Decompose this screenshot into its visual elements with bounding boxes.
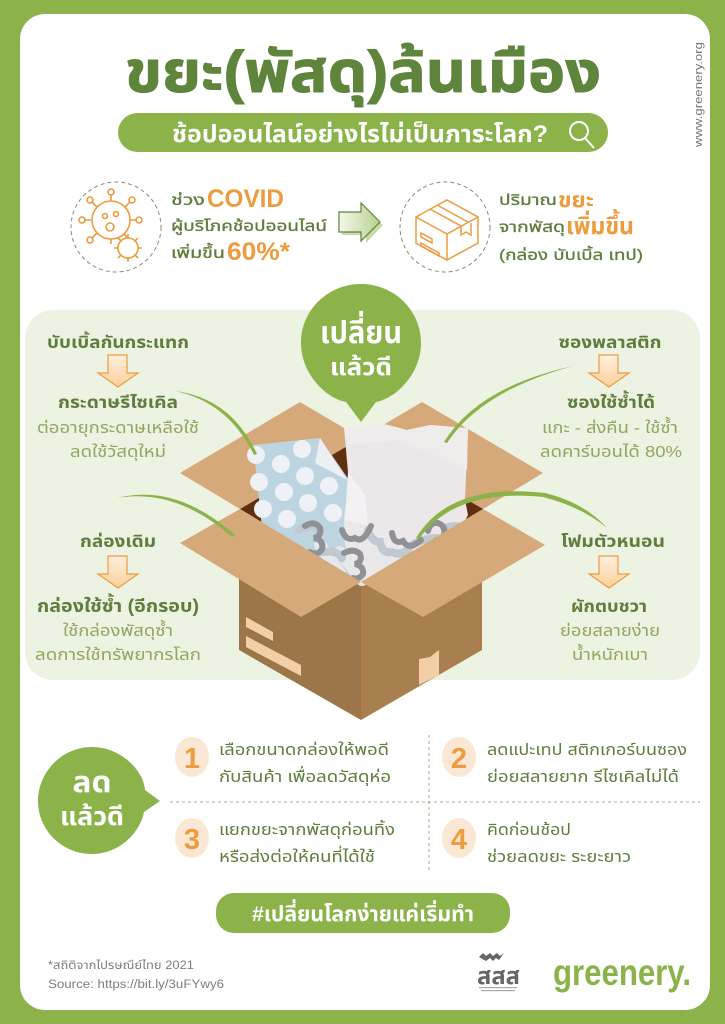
swap: plastic mailer to reusable mailer: ซองใช้ซ้ำได้ xyxy=(567,390,655,412)
hashtag pill: #เปลี่ยนโลกง่ายแค่เริ่มทำ xyxy=(252,899,474,926)
swap: old box to reused box: กล่องเดิม xyxy=(80,531,156,551)
swap: foam peanuts to water hyacinth: โฟมตัวหนอน xyxy=(561,532,665,551)
text: covid statistic: ช่วง xyxy=(171,191,205,209)
panel: change is good xyxy=(25,310,700,680)
tip 3: หรือส่งต่อให้คนที่ได้ใช้ xyxy=(219,845,375,866)
swap: old box to reused box: กล่องใช้ซ้ำ (อีกรอบ) xyxy=(37,593,199,616)
swap: plastic mailer to reusable mailer xyxy=(540,333,682,461)
swap: bubble wrap to recycled paper: ลดใช้วัสดุใหม่ xyxy=(70,443,166,461)
arrow: down xyxy=(98,556,138,588)
footnote source xyxy=(48,959,224,991)
tip 4: คิดก่อนช้อป xyxy=(487,821,571,839)
swap: foam peanuts to water hyacinth xyxy=(560,532,665,664)
tip 2: ย่อยสลายยาก รีไซเคิลไม่ได้ xyxy=(487,768,679,786)
foam peanuts xyxy=(299,523,465,580)
arrow: down xyxy=(589,355,629,387)
text: covid statistic: 60%* xyxy=(227,238,290,266)
logo: greenery: greenery. xyxy=(553,952,691,993)
swap: old box to reused box: ใช้กล่องพัสดุซ้ำ xyxy=(63,619,173,640)
arrow: leads to xyxy=(339,203,383,243)
tip 3: แยกขยะจากพัสดุก่อนทิ้ง xyxy=(219,819,395,839)
tip 2 xyxy=(442,737,687,786)
icon: magnifier xyxy=(570,122,594,148)
text: waste amount: ปริมาณ xyxy=(499,192,557,209)
text: covid statistic: COVID xyxy=(207,185,284,213)
footnote source: *สถิติจากไปรษณีย์ไทย 2021 xyxy=(48,959,194,972)
tip 4: 4 xyxy=(451,824,467,856)
title: ขยะ(พัสดุ)ล้นเมือง xyxy=(125,40,601,107)
tip 1: 1 xyxy=(184,743,200,775)
bubble wrap xyxy=(247,438,352,584)
logo: thaihealth: สสส xyxy=(477,963,520,990)
callout: reduce is good: แล้วดี xyxy=(60,801,124,831)
swap: bubble wrap to recycled paper: กระดาษรีไซเคิล xyxy=(58,393,178,412)
callout: change is good: เปลี่ยน xyxy=(320,310,402,350)
swap: bubble wrap to recycled paper: ต่ออายุกระดาษเหลือใช้ xyxy=(37,419,199,437)
box front flaps xyxy=(180,509,545,617)
swap: bubble wrap to recycled paper xyxy=(37,331,199,461)
text: covid statistic: เพิ่มขึ้น xyxy=(171,242,225,262)
box label stripes xyxy=(246,617,439,685)
swap: old box to reused box: ลดการใช้ทรัพยากรโลก xyxy=(35,647,201,664)
swap: bubble wrap to recycled paper: บับเบิ้ลกันกระแทก xyxy=(47,331,189,352)
swap: old box to reused box xyxy=(35,531,201,664)
swap: foam peanuts to water hyacinth: ผักตบชวา xyxy=(571,597,647,616)
swap: plastic mailer to reusable mailer: แกะ - ส่งคืน - ใช้ซ้ำ xyxy=(542,416,678,437)
swap: plastic mailer to reusable mailer: ลดคาร์บอนได้ 80% xyxy=(540,444,682,461)
arrow: down xyxy=(98,355,138,387)
callout: reduce is good xyxy=(38,747,160,854)
icon: parcel box in dashed circle xyxy=(400,182,490,272)
text: covid statistic xyxy=(171,185,327,266)
text: waste amount xyxy=(499,189,643,264)
tip 1: กับสินค้า เพื่อลดวัสดุห่อ xyxy=(219,765,391,786)
tip 4 xyxy=(442,818,631,866)
text: waste amount: (กล่อง บับเบิ้ล เทป) xyxy=(499,245,643,264)
website url: www.greenery.org xyxy=(693,42,705,148)
text: waste amount: เพิ่มขึ้น xyxy=(566,209,634,240)
swap: plastic mailer to reusable mailer: ซองพลาสติก xyxy=(558,333,662,352)
plastic mailer xyxy=(344,424,468,585)
tip 2: 2 xyxy=(451,743,467,775)
text: waste amount: ขยะ xyxy=(558,189,594,212)
icon: virus in dashed circle xyxy=(71,182,161,272)
arrow: down xyxy=(589,556,629,588)
tip 1: เลือกขนาดกล่องให้พอดี xyxy=(219,741,389,759)
subtitle search bar: ช้อปออนไลน์อย่างไรไม่เป็นภาระโลก? xyxy=(172,120,548,148)
hashtag pill xyxy=(216,893,510,933)
subtitle search bar xyxy=(118,113,608,152)
swap: foam peanuts to water hyacinth: ย่อยสลายง่าย xyxy=(560,622,660,640)
box walls xyxy=(239,575,482,720)
tip 4: ช่วยลดขยะ ระยะยาว xyxy=(487,848,631,866)
illustration: open cardboard box xyxy=(117,366,607,720)
text: waste amount: จากพัสดุ xyxy=(499,219,565,236)
tip 1 xyxy=(175,737,391,786)
callout: reduce is good: ลด xyxy=(72,767,112,799)
callout: change is good: แล้วดี xyxy=(330,353,392,381)
swap: foam peanuts to water hyacinth: น้ำหนักเบา xyxy=(572,643,648,664)
callout: change is good xyxy=(301,284,421,422)
tip 3: 3 xyxy=(184,824,200,856)
text: covid statistic: ผู้บริโภคช้อปออนไลน์ xyxy=(171,218,327,235)
box back flaps and interior xyxy=(180,402,543,582)
footnote source: Source: https://bit.ly/3uFYwy6 xyxy=(48,979,224,991)
tip 3 xyxy=(175,818,395,866)
tip 2: ลดแปะเทป สติกเกอร์บนซอง xyxy=(487,742,687,759)
pointer curves xyxy=(117,366,607,539)
